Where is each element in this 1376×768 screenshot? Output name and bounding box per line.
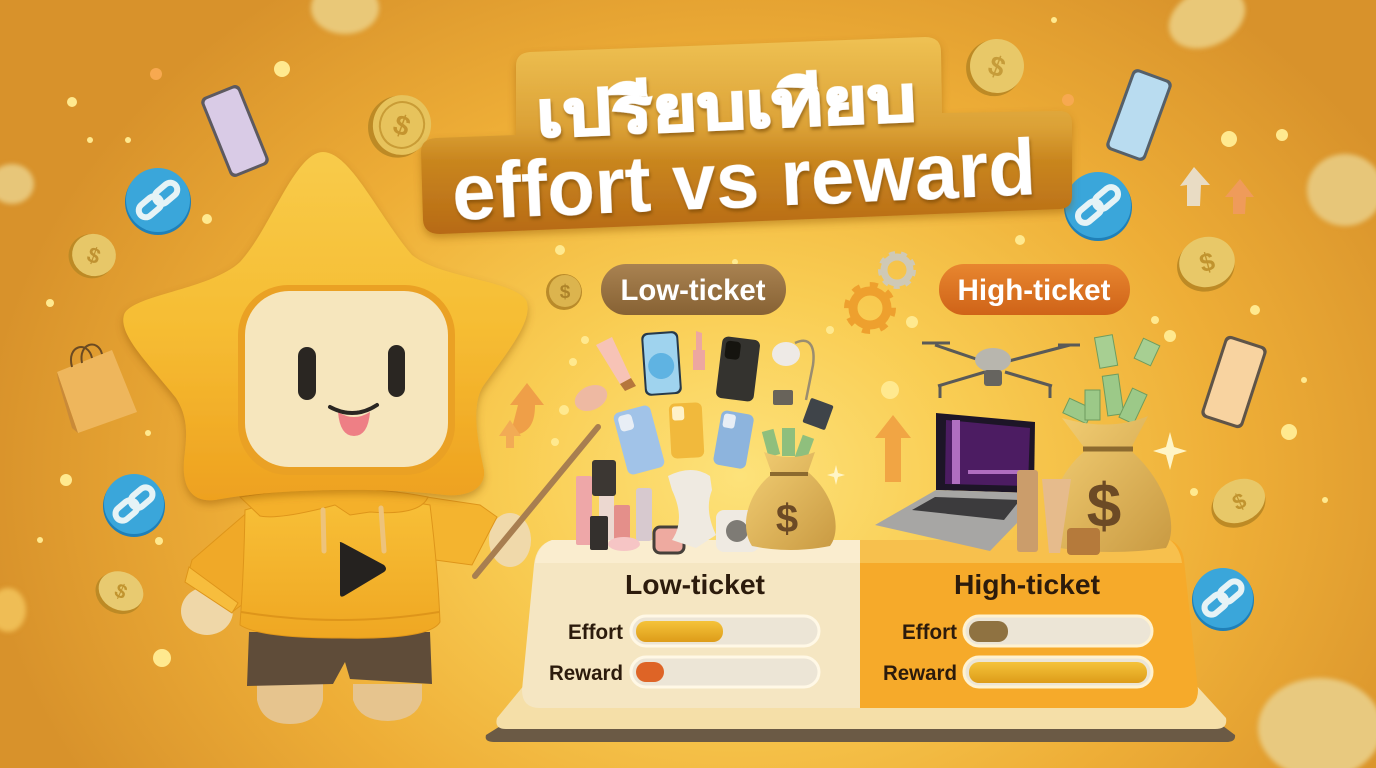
right sleeve [420,496,497,565]
coin [62,227,122,285]
phone light blue 1 [612,404,666,476]
icon: link [103,474,165,537]
pill: High-ticket [939,264,1130,315]
pink tube [596,337,636,391]
icon: gray gear [880,253,914,287]
arrow: white [1180,167,1210,206]
coin [546,274,582,310]
hood collar [240,488,428,517]
high-ticket products [875,335,1171,555]
high effort bar [964,616,1152,646]
high reward bar [964,657,1152,687]
coin: $ [560,282,571,303]
gold jar [1067,528,1100,555]
right hand [489,513,531,567]
gears [847,253,914,331]
phone yellow [669,402,704,459]
cream base [496,684,1226,729]
cream jar [571,380,611,416]
cash in bag [1063,374,1147,424]
eyes [298,345,405,400]
icon: phone blue [1105,67,1173,163]
mascot [123,152,598,724]
high heading: High-ticket [954,569,1100,600]
arrows top right [1180,167,1254,214]
arrow: orange [1225,179,1254,214]
play icon [340,542,386,597]
panel: high-ticket [860,540,1198,708]
coin: $ [1228,488,1250,515]
floating phones [199,67,1268,430]
low effort label: Effort [568,621,623,644]
icon: phone lilac [199,83,271,179]
title line 2: effort vs reward [450,122,1037,237]
face rim [238,285,455,475]
dark base [486,720,1235,742]
white device [668,470,716,548]
drawstrings [323,508,384,551]
coin: $ [1196,246,1218,278]
face [245,291,448,467]
icon: link [1192,568,1254,631]
sparkle stars [827,432,1187,485]
floating coins [62,30,1274,622]
star hood [123,152,528,500]
coin: $ [389,108,415,143]
laptop [875,413,1035,551]
link badges [103,168,1254,631]
coin [958,30,1032,104]
money bag high: $ [1087,472,1121,541]
pointer stick [475,427,598,576]
low-ticket products [571,331,836,553]
arrow: high [875,415,911,482]
money bag high [1051,416,1171,552]
phone light blue 2 [713,410,755,470]
high reward label: Reward [883,662,957,685]
mouth [330,405,377,436]
black phone [715,336,761,402]
money bag low [746,452,836,550]
sparkle dots [37,17,1328,667]
arrow: low small [499,420,521,448]
arrow: low [510,383,544,435]
coin [1171,231,1242,298]
beige tube [1042,479,1071,553]
pill: High-ticket: High-ticket [958,274,1111,307]
arrows near products [499,383,911,482]
icon: phone peach [1200,334,1268,430]
title banner [421,37,1072,237]
coin [1203,471,1274,536]
left hand [181,587,233,635]
low reward label: Reward [549,662,623,685]
low effort bar [631,616,819,646]
hoodie hem [241,612,439,620]
lipstick [693,331,705,370]
coin [89,563,150,622]
money low [762,428,814,463]
coin: $ [984,49,1010,84]
shorts [247,632,432,686]
coin: $ [111,580,130,604]
small tablet [802,398,834,430]
feet [257,684,422,724]
pill: Low-ticket: Low-ticket [620,274,766,307]
left sleeve [185,510,262,613]
pedestal [486,540,1235,742]
coin: $ [84,242,104,269]
hoodie [240,497,440,638]
low reward bar [631,657,819,687]
pill: Low-ticket [601,264,786,315]
blue phone [641,331,682,396]
lamp [772,341,814,405]
icon: shopping bag [57,344,137,433]
panel: low-ticket [522,540,860,708]
floating cash [1095,335,1160,368]
icon: link [125,168,191,235]
title line 1: เปรียบเทียบ [535,65,917,150]
square device [716,510,759,552]
high effort label: Effort [902,621,957,644]
banner shape [421,37,1072,234]
money bag low: $ [776,497,798,541]
icon: orange gear [847,285,893,331]
gold bottle [1017,470,1038,552]
icon: link [1064,172,1132,241]
low heading: Low-ticket [625,569,765,600]
cosmetics [576,460,684,553]
drone [922,343,1080,398]
coin [359,86,440,167]
